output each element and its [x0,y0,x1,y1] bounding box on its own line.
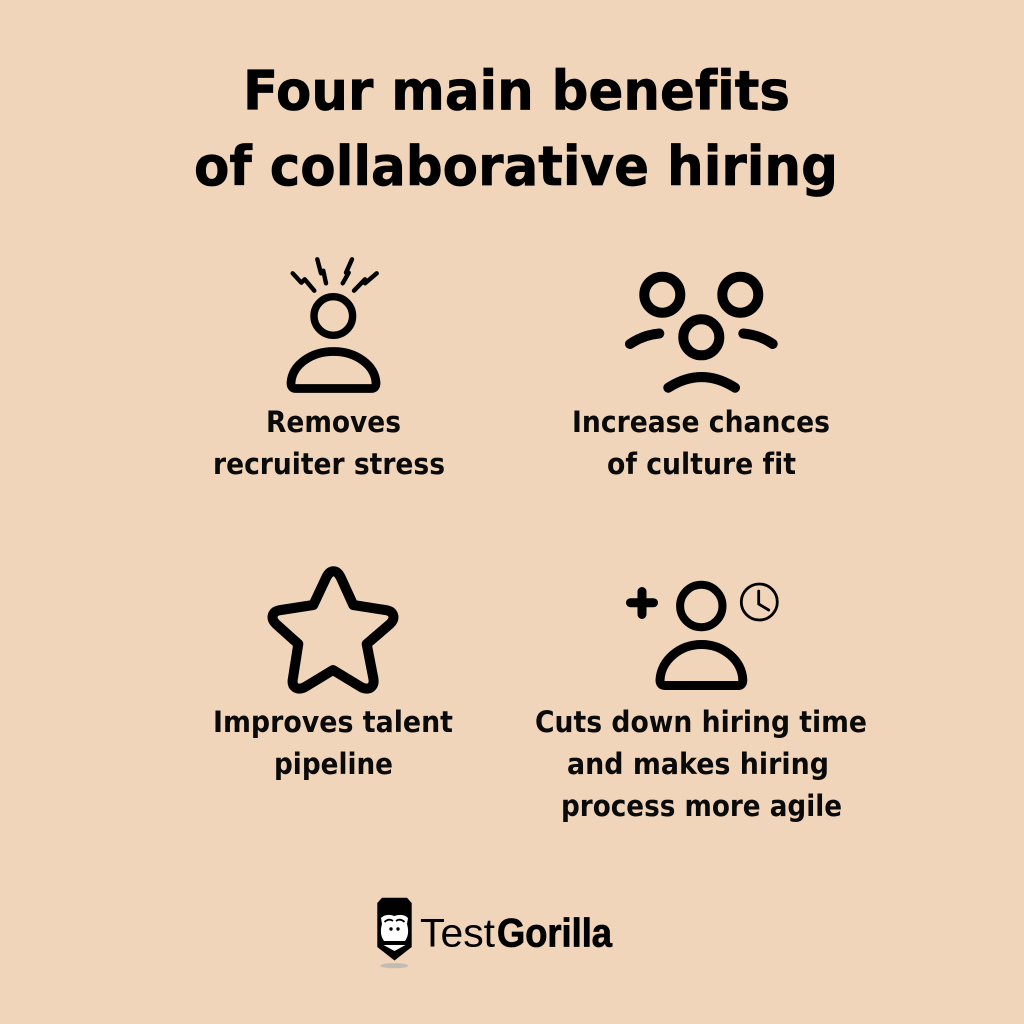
label: improves talent pipeline [213,705,453,781]
label: cuts down hiring time [535,705,867,823]
title: of collaborative hiring [194,135,838,198]
icon: group of people [630,277,773,388]
label: cuts down hiring time: process more agile [561,789,842,823]
icon: gorilla pencil [377,898,412,968]
icon: add person and clock [630,584,777,686]
label: improves talent pipeline: pipeline [274,747,393,781]
wordmark: Test [420,912,495,956]
label: increase chances of culture fit [572,405,830,481]
label: improves talent pipeline: Improves talent [213,705,453,739]
icon: star [273,571,393,689]
label: cuts down hiring time: Cuts down hiring time [535,705,867,739]
label: increase chances of culture fit: Increase chances [572,405,830,439]
label: removes recruiter stress [213,405,445,481]
label: removes recruiter stress: recruiter stress [213,447,445,481]
wordmark: Gorilla [497,912,613,956]
icon: stressed recruiter [291,259,377,388]
label: cuts down hiring time: and makes hiring [567,747,829,781]
title: Four main benefits [243,60,790,122]
label: removes recruiter stress: Removes [266,405,401,439]
logo: TestGorilla [377,898,613,968]
label: increase chances of culture fit: of culture fit [607,447,796,481]
title [194,60,838,198]
wordmark [420,912,613,956]
